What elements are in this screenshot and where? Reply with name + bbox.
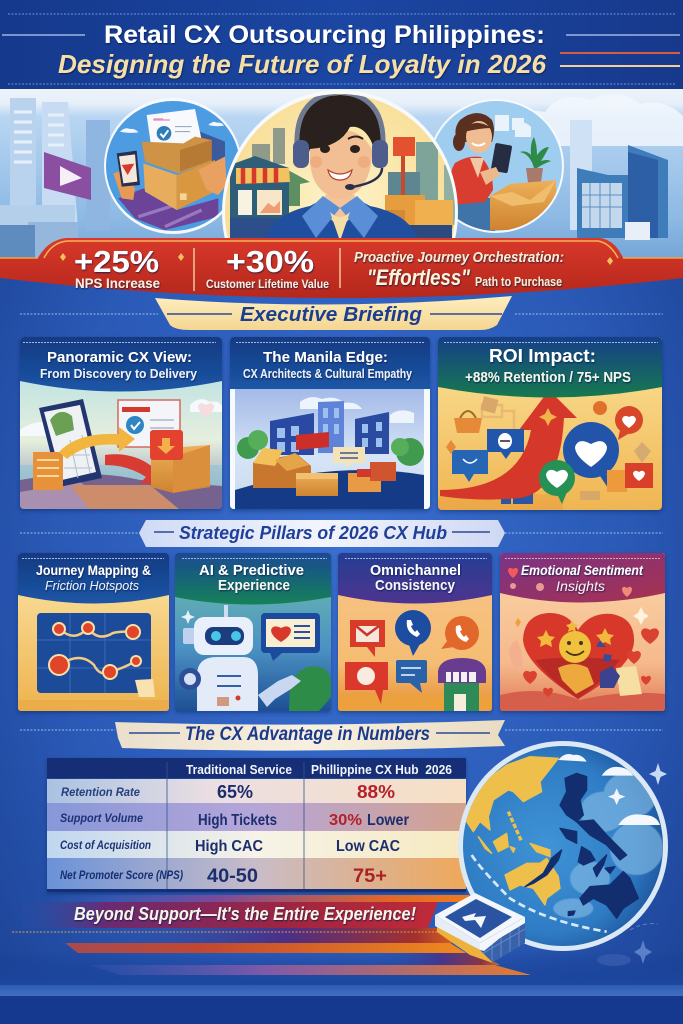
heading: strategic pillars [20,520,663,547]
comparison table [47,758,466,892]
panel text: Experience [218,577,290,594]
header [230,337,430,389]
speed streaks [12,895,531,975]
panel text [40,349,198,381]
row: cost of acquisition: Low CAC [336,838,400,855]
stat: NPS increase [74,244,160,291]
sparkles [649,763,667,785]
circle: agent with headset [222,90,458,238]
panel text: From Discovery to Delivery [40,366,198,381]
illustration: growth arrow and bubbles [438,390,653,510]
panel text: AI & Predictive [199,562,304,579]
banner: beyond support [22,902,438,928]
banner: beyond support: Beyond Support—It's the Entire Experience! [74,904,416,924]
icon: video play sign [44,152,91,200]
map: ocean shallows [553,772,663,918]
row: support volume: Lower [367,812,409,829]
panel: journey mapping [18,553,169,711]
panel text [243,349,413,381]
circle: parcel and phone [104,98,240,234]
header [500,553,665,602]
illustration: journey map [18,613,169,711]
city skyline left [0,98,110,265]
row: cost of acquisition [60,838,400,855]
panel text: Omnichannel [370,562,461,579]
illustration: city and parcels [235,397,424,509]
stat: proactive journey [354,250,564,290]
panel: the Manila edge [230,337,430,509]
heading: strategic pillars: Strategic Pillars of 2026 CX Hub [179,523,447,543]
panel text [199,562,304,594]
agent [266,92,418,240]
row: net promoter score: 75+ [353,866,387,887]
row: net promoter score [60,866,387,887]
header [175,553,331,604]
panel text: +88% Retention / 75+ NPS [465,369,631,386]
icon: headset [293,92,388,190]
row: net promoter score: Net Promoter Score (NPS) [60,868,183,882]
panel: panoramic CX view [20,337,222,510]
title [58,21,547,79]
table header: Traditional Service [186,763,292,777]
illustration: heart with smiley [500,607,665,711]
panel text: Panoramic CX View: [47,349,192,366]
city buildings behind agent [252,128,458,232]
panel text [36,562,151,593]
panel text: Journey Mapping & [36,562,151,578]
panel text: Insights [556,578,605,594]
header [18,553,169,604]
illustration: robot with chat bubble [179,605,332,711]
stat: proactive journey: Path to Purchase [475,275,562,289]
panel: emotional sentiment insights [500,553,665,711]
panel text [465,346,631,386]
icon: isometric building [435,893,530,965]
row: support volume [60,811,409,829]
panel text: Consistency [375,577,456,594]
hero illustration [0,89,683,258]
map: asia and australia [465,757,560,905]
heading: executive briefing [20,296,663,330]
map: philippines and islands [525,773,638,918]
storefront [230,156,290,240]
header [338,553,492,604]
row: support volume: High Tickets [198,812,277,829]
row: retention rate: Retention Rate [61,785,140,799]
header [20,337,222,392]
circle: shopper with tablet [434,99,564,233]
illustration: channel icons [338,610,492,711]
illustration: journey from tablet to parcel [20,399,222,510]
stat: proactive journey: "Effortless" [367,265,470,290]
panel text [370,562,461,594]
row: cost of acquisition: High CAC [195,838,263,855]
stat: customer lifetime value: Customer Lifetime Value [206,277,329,291]
stat: NPS increase: +25% [74,244,159,279]
clouds [558,754,660,825]
panel: omnichannel consistency [338,553,492,711]
panel text: ROI Impact: [489,346,596,366]
heading: executive briefing: Executive Briefing [240,304,422,326]
header band [0,0,683,89]
table header: Phillippine CX Hub 2026 [311,763,452,777]
stat ribbon [0,238,683,298]
stat: NPS increase: NPS Increase [75,275,160,291]
row: retention rate: 88% [357,782,395,802]
row: support volume: Support Volume [60,811,143,825]
title: Designing the Future of Loyalty in 2026 [58,49,547,79]
parcels [384,195,453,228]
row: retention rate [61,782,395,802]
globe [458,741,668,966]
panel text: Friction Hotspots [45,578,139,593]
row: retention rate: 65% [217,782,253,802]
row: net promoter score: 40-50 [207,866,258,887]
header [438,337,662,398]
panel text: CX Architects & Cultural Empathy [243,366,413,381]
panel text: The Manila Edge: [263,349,388,366]
heading: CX advantage: The CX Advantage in Numbers [185,724,430,745]
row: support volume: 30% [329,812,362,829]
panel: AI and predictive experience [175,553,332,711]
row: cost of acquisition: Cost of Acquisition [60,838,151,852]
stat: customer lifetime value: +30% [226,244,314,279]
heading: CX advantage [20,720,663,751]
lamp post [393,137,415,195]
title: Retail CX Outsourcing Philippines: [104,21,545,49]
panel: ROI impact [438,337,662,510]
stat: customer lifetime value [206,244,329,291]
panel text [521,562,644,594]
stat: proactive journey: Proactive Journey Orchestration: [354,250,564,266]
table header [186,763,452,777]
city skyline right [570,120,668,240]
panel text: Emotional Sentiment [521,562,644,578]
